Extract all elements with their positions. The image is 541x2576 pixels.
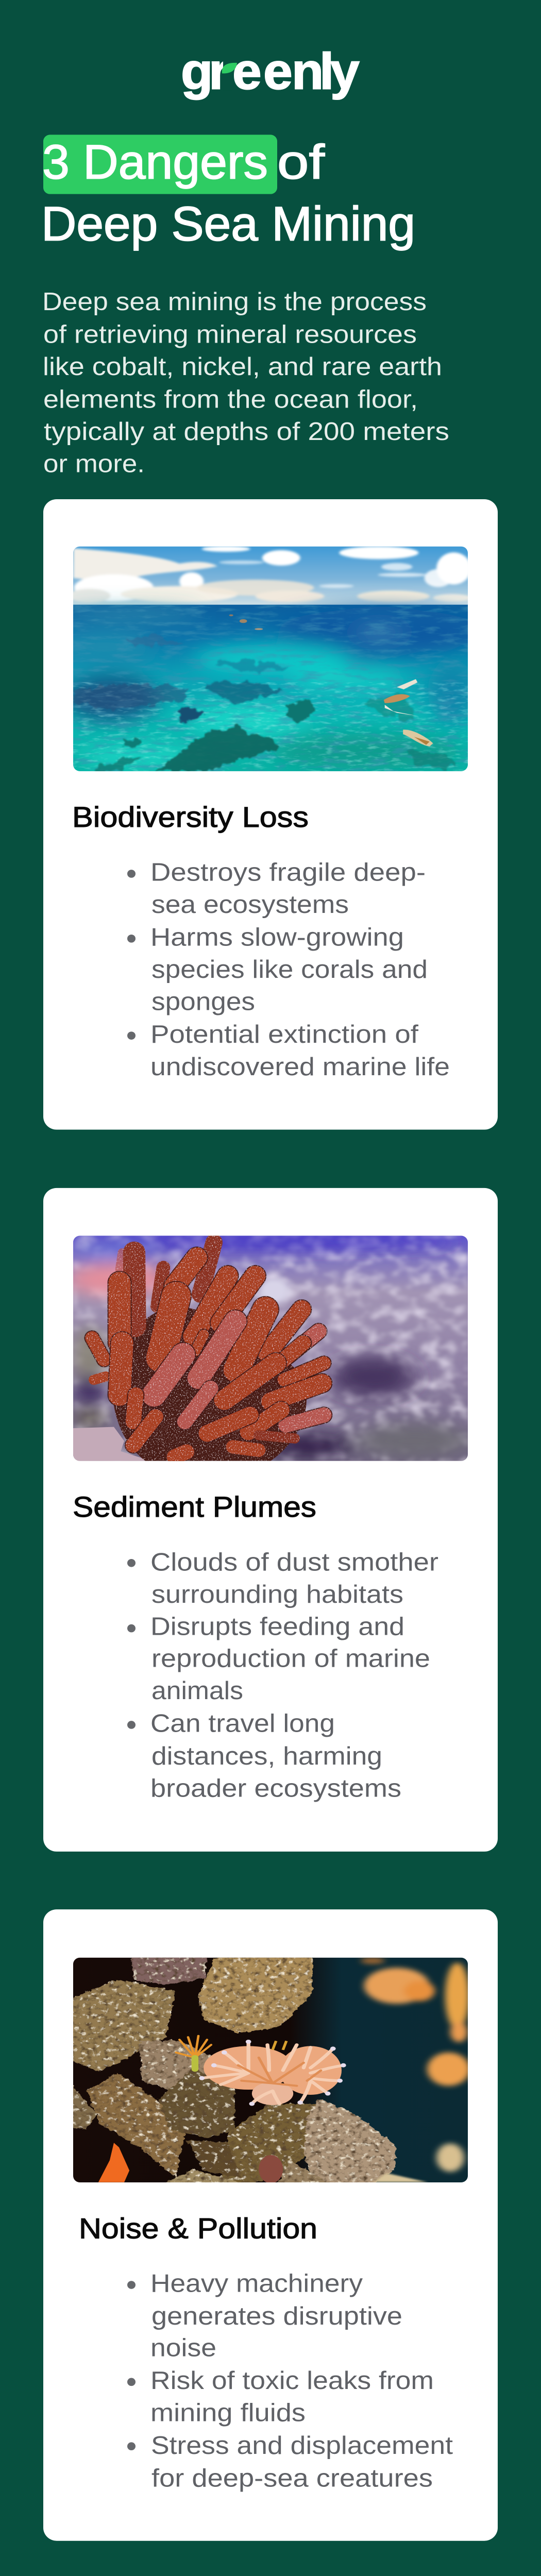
photo: turquoise ocean [52,546,483,772]
bullet list: mining fluids [150,2399,306,2427]
photo: red coral [65,1235,472,1461]
title line 2: Deep Sea Mining [41,197,415,251]
bullet list: Potential extinction of [150,1020,418,1048]
bullet list: animals [151,1677,243,1705]
bullet list: undiscovered marine life [150,1053,450,1081]
bullet list [127,2269,453,2492]
bullet list: for deep-sea creatures [151,2464,433,2492]
intro paragraph: elements from the ocean floor, [43,385,418,413]
heading: Sediment Plumes [73,1491,316,1523]
intro paragraph [42,288,449,478]
bullet list: Can travel long [150,1709,335,1737]
bullet list [127,1548,438,1802]
bullet list: Clouds of dust smother [150,1548,438,1576]
bullet list: species like corals and [151,955,428,984]
intro paragraph: of retrieving mineral resources [43,320,417,348]
card background [43,1188,498,1852]
bullet list: Risk of toxic leaks from [150,2367,434,2395]
title highlight box [43,135,277,194]
logo [181,43,360,100]
heading: Biodiversity Loss [72,801,309,833]
title line 1: 3 Dangers [42,135,268,189]
bullet list: Stress and displacement [151,2431,453,2460]
intro paragraph: like cobalt, nickel, and rare earth [43,352,442,381]
bullet list: sea ecosystems [151,891,349,919]
card background [43,499,498,1130]
photo: reef rocks and anemone [71,1956,470,2186]
bullet list: distances, harming [151,1742,382,1770]
intro paragraph: typically at depths of 200 meters [44,417,449,446]
panel: sediment plumes [43,1188,498,1852]
bullet list: Disrupts feeding and [150,1613,404,1640]
heading: Noise & Pollution [79,2212,317,2244]
bullet list: broader ecosystems [150,1774,401,1802]
card background [43,1909,498,2541]
panel: noise and pollution [43,1909,498,2541]
intro paragraph: Deep sea mining is the process [42,288,427,316]
bullet list: generates disruptive [151,2302,402,2330]
orange fish [98,2143,129,2182]
panel: biodiversity loss [43,499,498,1130]
title word: of: of [277,135,325,189]
intro paragraph: or more. [43,450,145,478]
bullet list: Heavy machinery [150,2269,363,2298]
bullet list: sponges [151,988,255,1015]
bullet list [127,858,450,1081]
bullet list: noise [150,2334,216,2362]
icon: leaf [222,63,237,74]
logo wordmark: greenly [181,43,360,100]
bullet list: Harms slow-growing [150,923,404,951]
title [41,135,415,251]
bullet list: reproduction of marine [151,1645,430,1673]
bullet list: surrounding habitats [151,1580,403,1608]
anemone [199,2040,346,2106]
bullet list: Destroys fragile deep- [150,858,426,886]
small orange polyp [176,2036,211,2069]
